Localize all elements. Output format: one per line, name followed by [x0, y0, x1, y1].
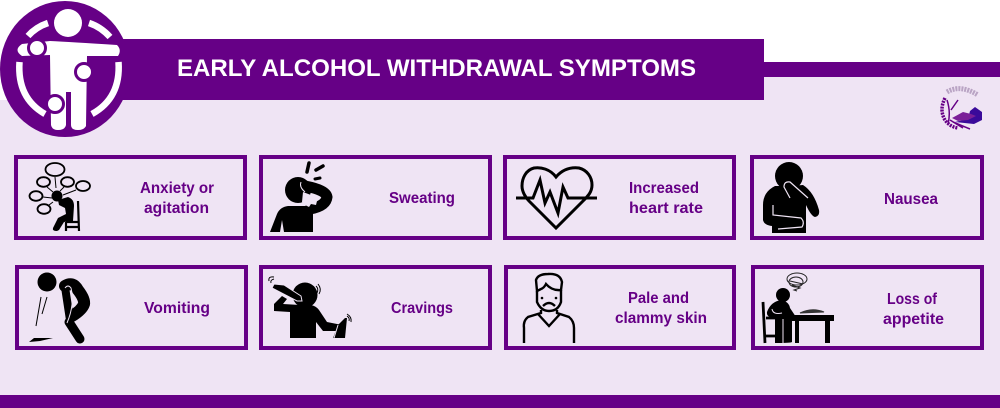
label: heart rate	[629, 200, 703, 217]
panel: sweating	[261, 157, 490, 238]
bottom band	[0, 395, 1000, 408]
label: Sweating	[389, 190, 455, 207]
title: EARLY ALCOHOL WITHDRAWAL SYMPTOMS	[177, 55, 696, 82]
label: Loss of	[887, 291, 938, 308]
icon: person wiping sweat	[270, 163, 327, 232]
label: Pale and	[628, 290, 689, 307]
label: Nausea	[884, 191, 938, 208]
title banner	[120, 39, 764, 100]
label: Increased	[629, 180, 699, 197]
panel: anxiety or agitation	[16, 157, 245, 238]
label: Vomiting	[144, 300, 210, 317]
icon: person drinking from a bottle	[269, 277, 351, 338]
panel: cravings	[261, 267, 490, 348]
label: agitation	[144, 200, 209, 217]
right header stripe	[764, 62, 1000, 77]
icon: person covering mouth	[763, 162, 819, 233]
label: clammy skin	[615, 310, 707, 327]
panel: pale and clammy skin	[506, 267, 734, 348]
icon: person vomiting	[29, 272, 84, 342]
label: appetite	[883, 311, 944, 328]
panel: increased heart rate	[505, 157, 734, 238]
right background panel	[764, 77, 1000, 100]
logo	[942, 89, 982, 129]
icon: anxious person with thought bubbles	[30, 163, 90, 231]
icon: heart with pulse	[516, 168, 597, 228]
label: Anxiety or	[140, 180, 214, 197]
panel: nausea	[752, 157, 982, 238]
icon: sick man	[524, 274, 574, 343]
panel: loss of appetite	[753, 267, 982, 348]
label: Cravings	[391, 300, 453, 317]
page background	[0, 100, 1000, 408]
icon: person at table refusing food	[763, 273, 834, 343]
panel: vomiting	[17, 267, 246, 348]
icon: body with pain points	[0, 1, 130, 137]
